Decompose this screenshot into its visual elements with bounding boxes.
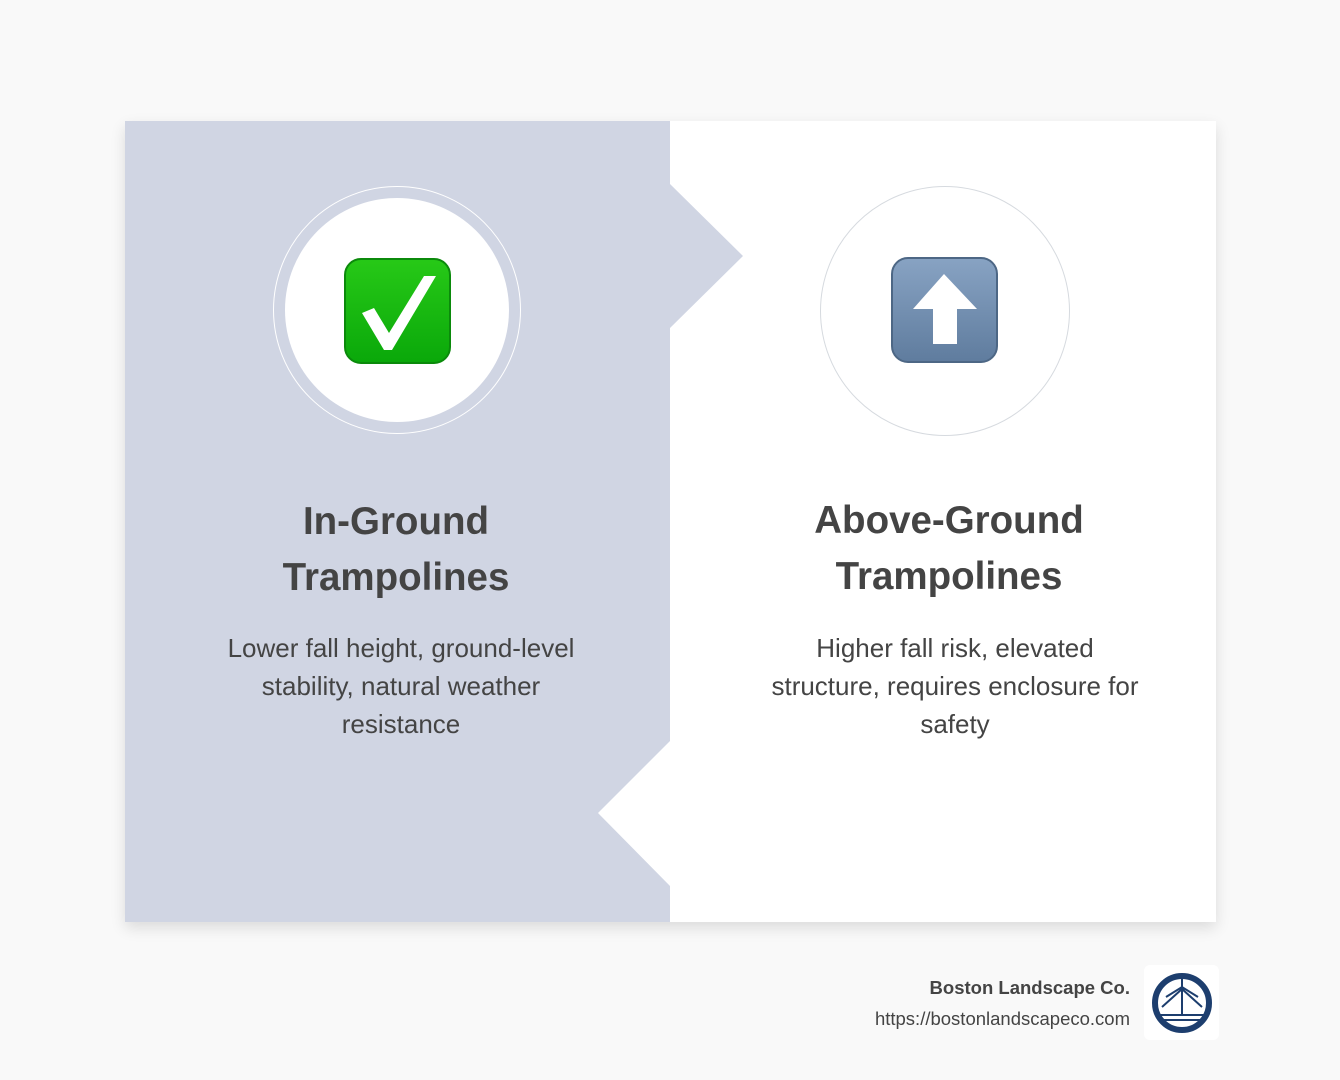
footer: brand: https://bostonlandscapeco.com: [875, 1008, 1130, 1029]
panel: in-ground background: [125, 121, 743, 922]
title: above-ground: Above-Ground: [814, 499, 1084, 542]
title: in-ground: [283, 500, 509, 599]
icon circle: above-ground: [820, 186, 1070, 436]
footer: brand: Boston Landscape Co.: [930, 977, 1130, 998]
footer: brand: [875, 977, 1130, 1029]
title: above-ground: Trampolines: [836, 555, 1062, 598]
title: in-ground: In-Ground: [303, 500, 489, 543]
card: [125, 121, 1216, 922]
text: above-ground description: structure, requires enclosure for: [771, 671, 1139, 701]
icon: up arrow: [891, 257, 998, 363]
text: in-ground description: resistance: [342, 709, 460, 739]
text: above-ground description: [771, 633, 1139, 739]
text: in-ground description: stability, natural weather: [262, 671, 540, 701]
text: above-ground description: safety: [920, 709, 990, 739]
logo: [1144, 965, 1219, 1040]
text: above-ground description: Higher fall risk, elevated: [816, 633, 1094, 663]
text: in-ground description: Lower fall height, ground-level: [228, 633, 574, 663]
title: in-ground: Trampolines: [283, 556, 509, 599]
icon circle: in-ground: [273, 186, 521, 434]
icon: green check: [344, 258, 451, 364]
text: in-ground description: [228, 633, 574, 739]
title: above-ground: [814, 499, 1084, 598]
